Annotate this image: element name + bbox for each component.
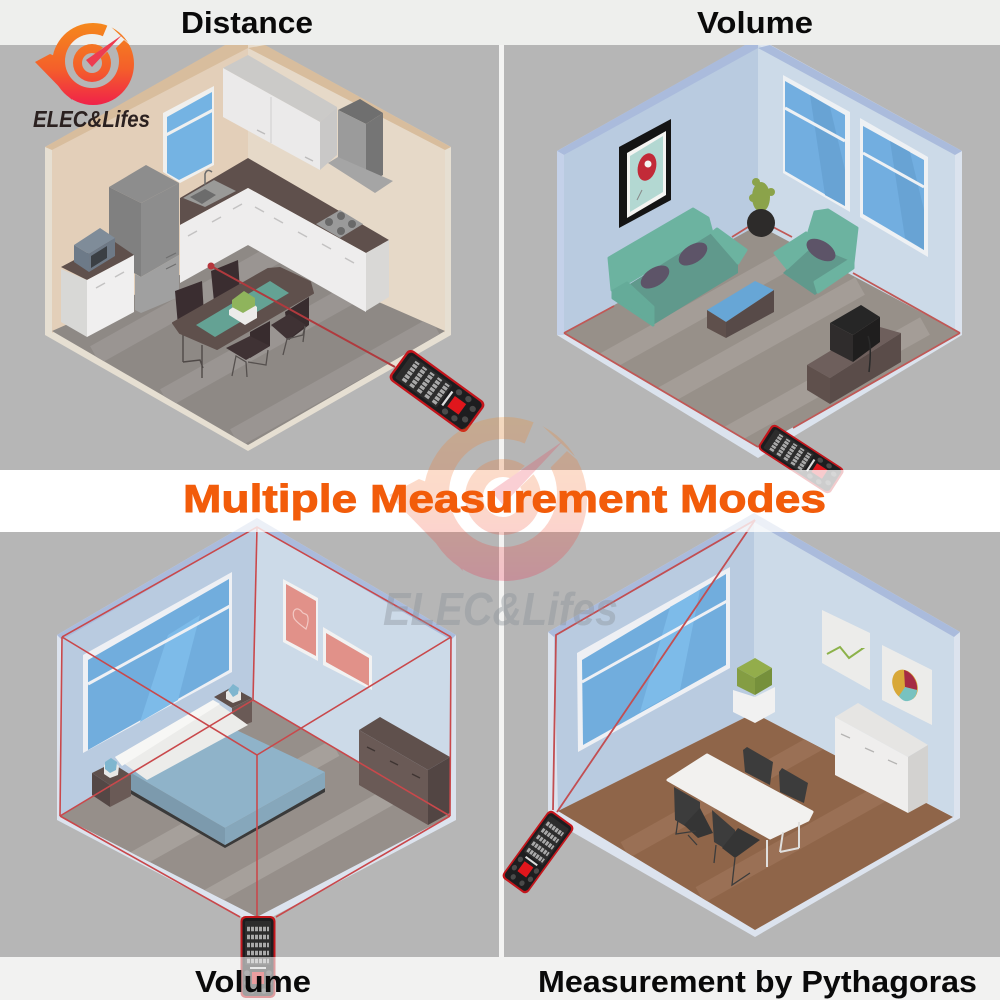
refrigerator (109, 165, 179, 313)
Pythagoras laser lines (553, 520, 755, 812)
line chart frame (822, 610, 870, 690)
heading: Volume bottom: Volume (195, 964, 311, 999)
pie chart frame (882, 645, 932, 725)
heading: Distance: Distance (181, 5, 313, 40)
band overlay (0, 470, 1000, 532)
logo mark (35, 23, 134, 105)
upper cabinets (223, 55, 337, 170)
framed balloon picture (619, 119, 671, 228)
laser meter device (757, 423, 845, 495)
white sideboard (835, 703, 928, 813)
armchair (775, 210, 857, 295)
room shell (57, 518, 456, 925)
microwave on cabinet (61, 228, 134, 337)
windows (783, 75, 928, 257)
dresser (359, 717, 450, 825)
coffee table (707, 281, 774, 338)
panel: distance kitchen room (45, 36, 487, 451)
room shell (45, 36, 451, 451)
wide window (83, 572, 232, 753)
cactus in pot (747, 178, 775, 237)
room shell (557, 38, 962, 458)
panel: Pythagoras office (501, 513, 960, 937)
watermark text: ELEC&Lifes (383, 583, 618, 635)
wall frames (283, 579, 372, 690)
laser meter device (387, 348, 487, 434)
room shell (548, 513, 960, 937)
L-shaped counter (180, 158, 389, 312)
logo wordmark: ELEC&Lifes (33, 106, 150, 132)
central white band (0, 470, 1000, 532)
conference table with chairs (668, 747, 812, 885)
range hood (328, 99, 393, 193)
panel: volume bedroom (57, 518, 456, 998)
top heading strip (0, 0, 1000, 45)
potted green cube (733, 658, 775, 723)
laser cube lines (60, 527, 451, 917)
panel: volume living room (557, 38, 962, 495)
bed (115, 700, 325, 848)
dining table with chairs (173, 260, 313, 378)
sofa (609, 209, 746, 325)
brand logo (33, 23, 150, 132)
heading: Measurement by Pythagoras: Measurement by Pythagoras (538, 964, 977, 999)
kitchen window (163, 86, 214, 183)
TV on stand (807, 305, 901, 404)
laser beam (208, 262, 395, 367)
wide window (577, 567, 730, 752)
title: Multiple Measurement Modes: Multiple Measurement Modes (183, 478, 826, 521)
laser meter device (501, 809, 575, 895)
laser meter device (240, 916, 276, 998)
bottom heading strip (0, 957, 1000, 1000)
bedside table far (214, 684, 252, 730)
bedside table near (92, 758, 131, 807)
heading: Volume top: Volume (697, 5, 813, 40)
watermark logo (389, 417, 587, 581)
